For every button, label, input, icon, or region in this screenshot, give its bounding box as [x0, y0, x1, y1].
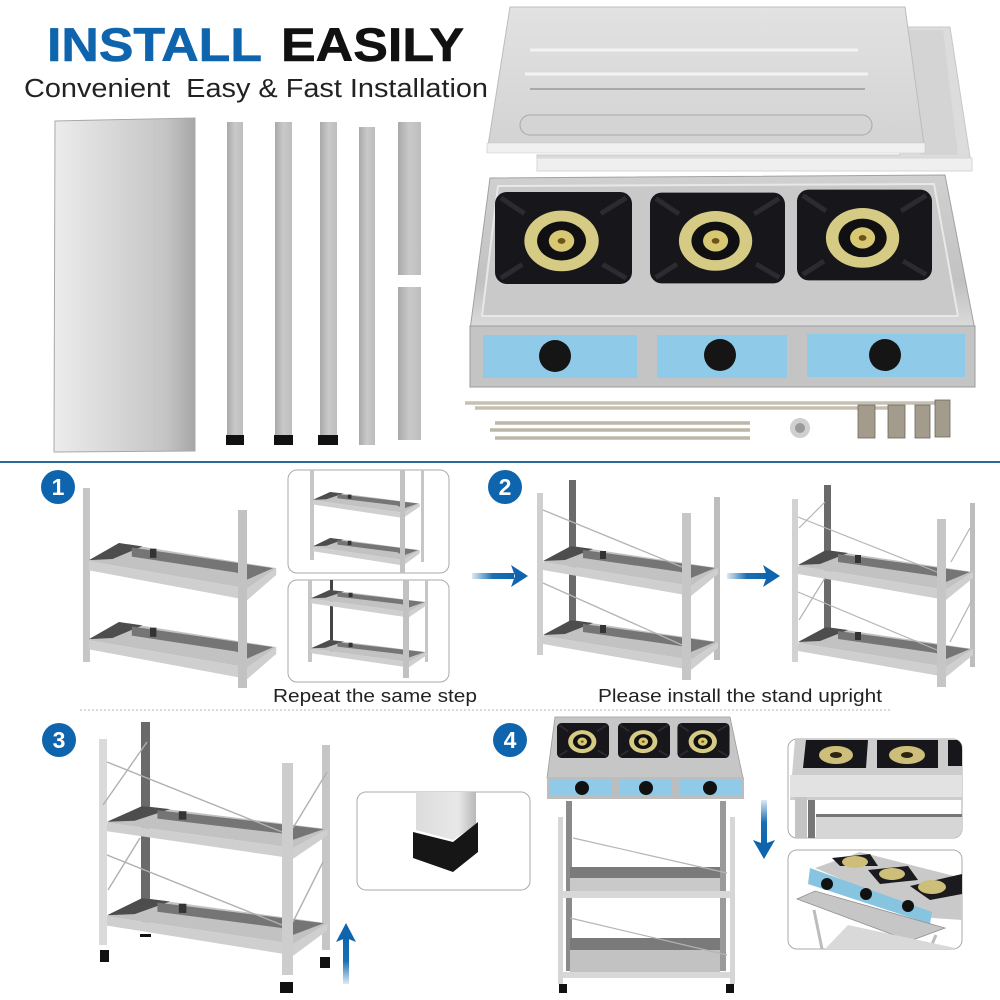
step 2 badge: [488, 470, 522, 504]
step 3 rack: [99, 722, 330, 993]
subtitle: Convenient Easy & Fast Installation: [24, 75, 488, 103]
parts: legs: [226, 122, 375, 445]
step 4 badge: [493, 723, 527, 757]
step 1 inset bottom: [288, 580, 449, 682]
step 2 rack b: [792, 485, 975, 687]
arrow down: [753, 800, 775, 859]
step 1 badge: 1: [52, 474, 65, 500]
stove top surface: [470, 175, 975, 330]
knobs: [539, 339, 901, 372]
burner left: [495, 192, 632, 284]
step 3 badge: 3: [53, 727, 65, 753]
title: [47, 18, 464, 71]
front shelf plate: [487, 7, 925, 153]
step 4 rack: [558, 801, 735, 993]
caption: repeat: Repeat the same step: [273, 686, 477, 706]
burner right: [797, 190, 932, 280]
arrow right 2: [727, 565, 780, 587]
inset: stove seated on rack: [788, 739, 962, 838]
three burner stove: [470, 175, 975, 387]
parts: short side strips: [398, 122, 421, 440]
step 1 rack: [83, 488, 276, 688]
arrow right 1: [472, 565, 528, 587]
control panels: [483, 334, 965, 378]
dotted separator: [80, 709, 890, 711]
arrow up: [336, 923, 356, 984]
section divider: [0, 461, 1000, 463]
step 1 inset top: [288, 470, 449, 573]
inset: foot detail: [357, 792, 530, 890]
step 2 rack a: [537, 480, 720, 680]
inset: stove side view: [788, 850, 962, 949]
hardware: rods, screws, brackets: [465, 400, 950, 438]
step 4 badge: 4: [504, 727, 517, 753]
stove front: [470, 326, 975, 387]
title: INSTALL: [47, 18, 262, 71]
parts: back panel: [54, 118, 195, 452]
title: EASILY: [281, 18, 464, 71]
step 2 badge: 2: [499, 474, 511, 500]
step 1 badge: [41, 470, 75, 504]
burner middle: [650, 193, 785, 283]
step 3 badge: [42, 723, 76, 757]
rear shelf plate: [537, 27, 972, 171]
caption: upright: Please install the stand upright: [598, 686, 882, 706]
step 4 stove: [547, 717, 744, 799]
